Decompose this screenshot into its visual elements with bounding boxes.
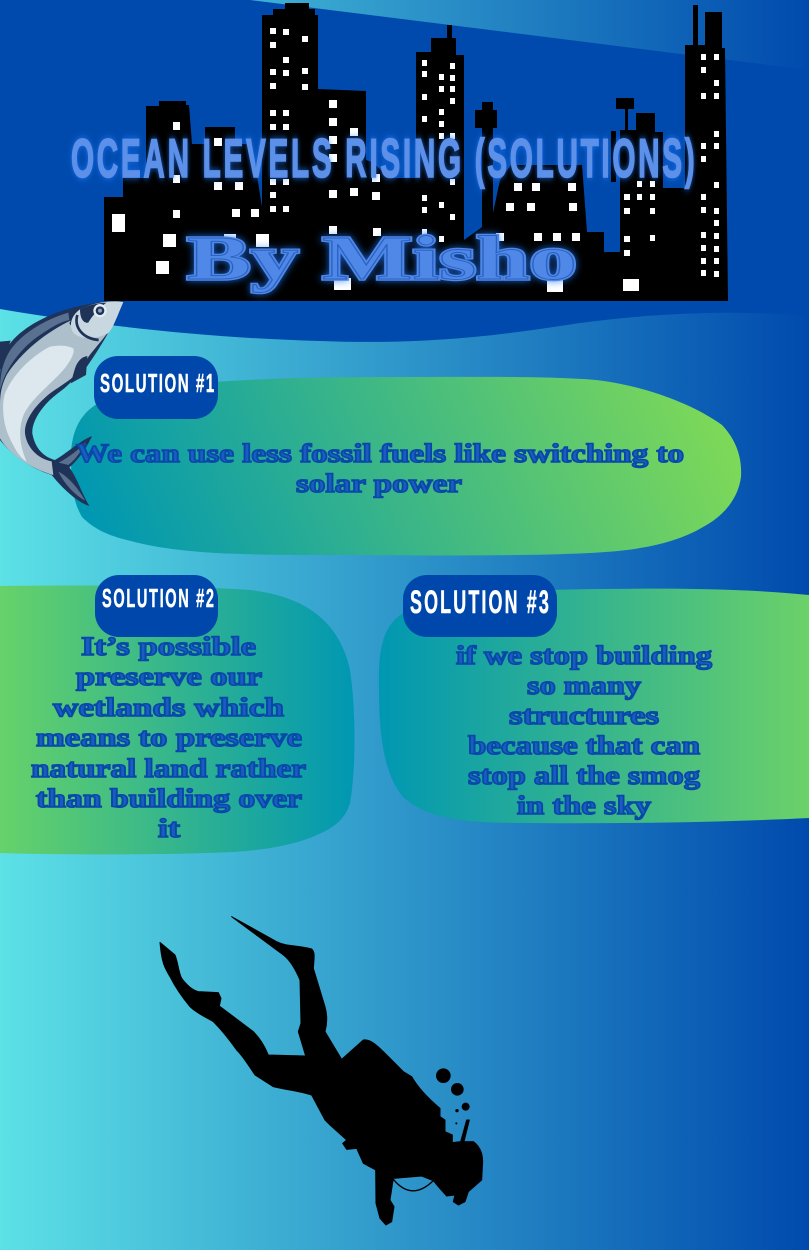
solution 3 text [456, 641, 712, 820]
solution 3 text: because that can [468, 731, 701, 760]
byline [187, 225, 577, 293]
solution 3 text: stop all the smog [468, 761, 700, 790]
solution 2 text: natural land rather [31, 754, 306, 783]
solution 3 background blob [379, 589, 809, 823]
solution 3 text: in the sky [517, 791, 651, 820]
solution 2 badge: SOLUTION #2 [102, 585, 214, 613]
city skyline silhouette [104, 3, 728, 301]
solution 2 text: preserve our [76, 662, 262, 691]
solution 1 text [76, 439, 684, 498]
solution 1 badge: SOLUTION #1 [100, 369, 214, 398]
lit windows [112, 28, 719, 292]
dark blue sky wave [0, 0, 809, 342]
solution 1 text: We can use less fossil fuels like switching to [76, 439, 684, 468]
title: OCEAN LEVELS RISING (SOLUTIONS) [71, 128, 695, 189]
solution 2 text: wetlands which [53, 693, 285, 722]
panel: solution 1 [0, 301, 741, 555]
icon: scuba diver silhouette [160, 917, 483, 1225]
air bubbles [436, 1068, 470, 1124]
solution 2 background blob [0, 585, 354, 854]
byline: By Misho [187, 225, 577, 293]
solution 1 badge [94, 356, 218, 419]
solution 3 text: so many [527, 671, 641, 700]
solution 3 text: structures [509, 701, 659, 730]
panel: solution 3 [379, 575, 809, 823]
solution 1 background blob [71, 377, 741, 555]
solution 2 text: than building over [36, 784, 302, 813]
solution 2 text: means to preserve [36, 723, 302, 752]
icon: leaping fish [0, 301, 123, 506]
solution 1 text: solar power [296, 469, 462, 498]
panel: solution 2 [0, 575, 354, 854]
byline: By Misho [187, 225, 577, 293]
solution 2 text: it [158, 814, 180, 843]
solution 3 badge: SOLUTION #3 [410, 586, 549, 620]
solution 2 badge [95, 575, 218, 637]
solution 3 badge [403, 575, 557, 637]
solution 2 text [31, 632, 306, 843]
solution 2 text: It’s possible [81, 632, 256, 661]
solution 3 text: if we stop building [456, 641, 712, 670]
